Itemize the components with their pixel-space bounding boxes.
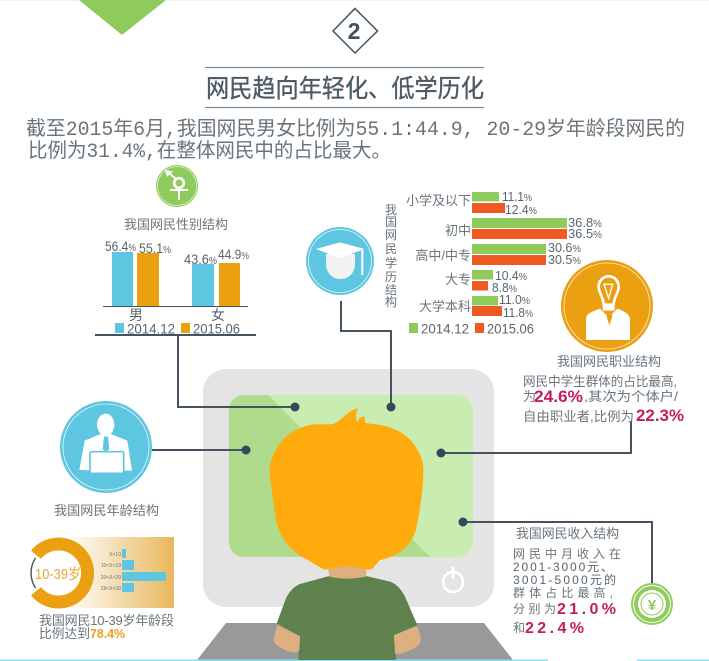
- age chart: 20<X<29: [101, 575, 121, 581]
- gender legend: [115, 320, 240, 336]
- monitor: [203, 369, 494, 607]
- occupation description: 自由职业者,比例为: [523, 409, 634, 424]
- education bar chart: 大专: [445, 272, 471, 287]
- section number badge: 2: [348, 18, 360, 44]
- education bar chart: [406, 189, 602, 320]
- education bar chart: 30.6%: [548, 240, 581, 255]
- income description: 网民中月收入在: [513, 546, 621, 561]
- education bar chart: 11.8%: [503, 305, 533, 320]
- intro paragraph: 截至2015年6月,我国网民男女比例为55.1:44.9, 20-29岁年龄段网民的: [26, 117, 685, 142]
- panel: age: [30, 401, 174, 641]
- gender legend: 2015.06: [193, 320, 240, 336]
- panel: education: [306, 189, 602, 336]
- income heading: 我国网民收入结构: [516, 526, 619, 541]
- green triangle marker: [79, 0, 166, 35]
- gender bar chart: 44.9%: [218, 246, 249, 262]
- education bar chart: 高中/中专: [415, 248, 471, 263]
- education bar chart: 30.5%: [548, 252, 581, 267]
- occupation description: [523, 374, 684, 425]
- education bar chart: 36.5%: [568, 226, 602, 241]
- income description: 3001-5000元的: [513, 572, 616, 587]
- education vertical heading: 民: [385, 242, 397, 256]
- age chart: 10<X<19: [101, 563, 121, 569]
- occupation description: ,其次为个体户/: [584, 389, 678, 404]
- education bar chart: 36.8%: [568, 215, 602, 230]
- occupation description: 网民中学生群体的占比最高,: [523, 374, 677, 389]
- occupation heading: 我国网民职业结构: [557, 354, 661, 369]
- income description: 和: [513, 621, 525, 635]
- intro paragraph: 比例为31.4%,在整体网民中的占比最大。: [28, 139, 391, 164]
- gender bar chart: 55.1%: [139, 240, 171, 256]
- age heading: 我国网民年龄结构: [54, 503, 159, 518]
- education legend: 2014.12: [421, 320, 469, 336]
- gender legend: 2014.12: [127, 320, 175, 336]
- education vertical heading: 历: [385, 270, 397, 284]
- age description: 比例达到: [39, 626, 90, 641]
- person from behind: [269, 408, 423, 660]
- connector: gender: [95, 335, 300, 412]
- age chart: [30, 537, 174, 608]
- education bar chart: 8.8%: [492, 280, 517, 295]
- age chart: 29<X<39: [101, 586, 121, 592]
- education vertical heading: 学: [385, 255, 397, 270]
- gender bar chart: 43.6%: [184, 251, 217, 267]
- education bar chart: 12.4%: [505, 202, 537, 217]
- gender heading: 我国网民性别结构: [124, 217, 228, 232]
- connector: income: [458, 518, 652, 584]
- gender bar chart: 56.4%: [105, 238, 136, 254]
- title: 网民趋向年轻化、低学历化: [206, 75, 484, 103]
- top edge strip: [0, 0, 709, 1]
- education vertical heading: 构: [385, 294, 397, 309]
- icon: yuan coin: ¥: [648, 597, 657, 614]
- education vertical heading: 网: [385, 228, 397, 242]
- income description: [513, 546, 621, 637]
- connector: occupation: [436, 421, 631, 458]
- income description: 分别为: [513, 602, 556, 616]
- panel: gender: [103, 165, 249, 336]
- icon: person with laptop: [60, 401, 152, 493]
- education vertical heading: 结: [385, 283, 397, 297]
- icon: lightbulb head: [561, 260, 653, 352]
- gender bar chart: [103, 238, 249, 323]
- occupation description: 24.6%: [534, 387, 583, 406]
- occupation description: 22.3%: [636, 406, 684, 425]
- education vertical heading: 我: [385, 203, 397, 217]
- connector: education: [341, 301, 396, 412]
- education bar chart: 11.1%: [502, 189, 532, 204]
- bottom cyan line: [0, 660, 709, 661]
- education bar chart: 10.4%: [495, 268, 527, 283]
- panel: income: [513, 526, 673, 637]
- education bar chart: 初中: [445, 223, 471, 238]
- gender bar chart: 男: [129, 307, 143, 323]
- age description: [39, 613, 174, 641]
- age chart: X<10: [109, 552, 121, 558]
- icon: graduation cap: [306, 227, 374, 295]
- icon: yuan coin: [631, 583, 673, 625]
- education legend: 2015.06: [487, 320, 534, 336]
- education legend: [409, 320, 534, 336]
- income description: 22.4%: [525, 620, 584, 637]
- panel: occupation: [523, 260, 684, 425]
- income description: 2001-3000元、: [513, 560, 613, 574]
- intro paragraph: [26, 117, 685, 164]
- education vertical heading: 国: [385, 215, 397, 229]
- occupation description: 为: [523, 389, 536, 404]
- age description: 78.4%: [90, 626, 125, 641]
- education bar chart: 大学本科: [419, 299, 471, 314]
- education bar chart: 11.0%: [499, 292, 530, 307]
- age description: 我国网民10-39岁年龄段: [39, 613, 174, 628]
- income description: 21.0%: [557, 601, 616, 618]
- keyboard desk: [197, 623, 513, 660]
- education vertical heading: [385, 203, 397, 309]
- icon: gender symbol: [156, 165, 198, 207]
- income description: 群体占比最高,: [513, 585, 613, 600]
- age chart: 10-39岁: [35, 566, 81, 583]
- gender bar chart: 女: [211, 307, 225, 323]
- section number badge: [333, 8, 378, 53]
- connector: age: [152, 446, 250, 454]
- education bar chart: 小学及以下: [406, 193, 471, 208]
